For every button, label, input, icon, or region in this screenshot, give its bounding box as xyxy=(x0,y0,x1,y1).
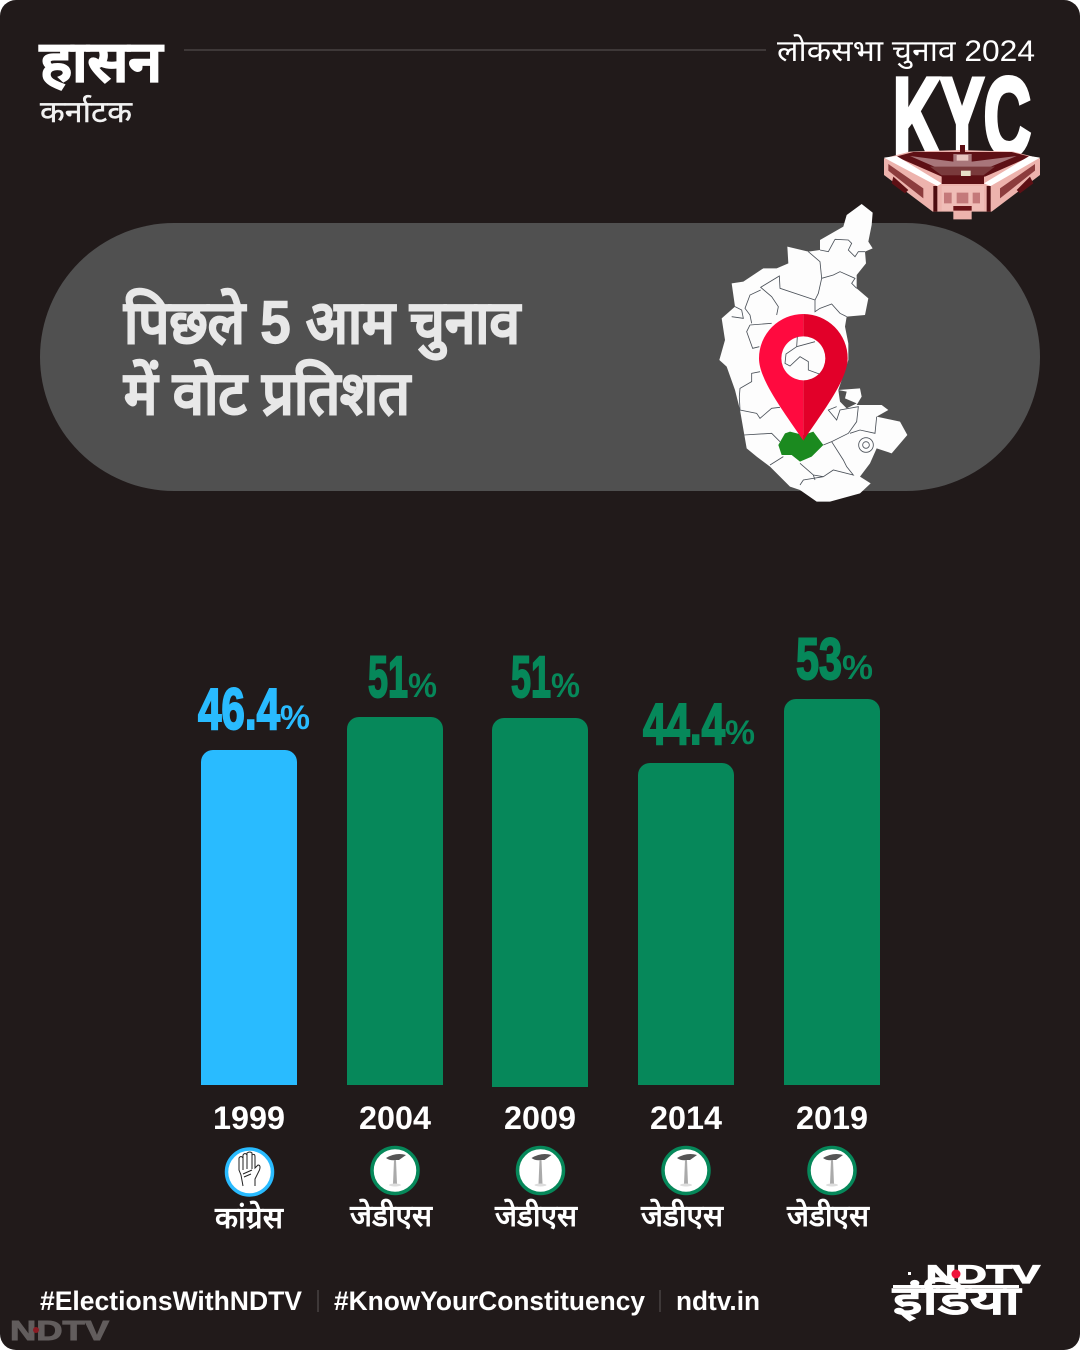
NDTV watermark: NDTV xyxy=(10,1315,109,1346)
bar chart xyxy=(198,627,880,1087)
map of Karnataka xyxy=(719,204,907,502)
hashtag: elections: #ElectionsWithNDTV xyxy=(40,1286,302,1316)
icon: JDS symbol 2014 xyxy=(663,1148,709,1194)
bar 2009: % xyxy=(551,667,580,705)
footer hashtags xyxy=(40,1286,760,1316)
banner heading xyxy=(123,288,522,427)
India wordmark: इंडिया xyxy=(892,1277,1022,1323)
party label: Congress: कांग्रेस xyxy=(214,1200,285,1235)
bar 2019: % xyxy=(842,649,873,687)
bar 1999: % xyxy=(280,699,310,737)
state outline xyxy=(719,204,907,502)
KYC logo with parliament xyxy=(884,56,1040,219)
bar 2019 xyxy=(784,627,880,1085)
bar 2009: 51 xyxy=(511,645,551,710)
icon: parliament building xyxy=(884,145,1040,219)
icon: JDS symbol 2004 xyxy=(372,1148,418,1194)
bar 2004: % xyxy=(408,667,437,705)
year 2019: 2019 xyxy=(796,1100,868,1136)
district borders xyxy=(732,239,877,485)
hole patch xyxy=(838,390,857,408)
party label: JDS 2014: जेडीएस xyxy=(640,1198,725,1233)
location pin xyxy=(759,314,848,441)
icon: JDS symbol 2009 xyxy=(518,1148,564,1194)
bar 2019: 53 xyxy=(796,627,842,692)
year 2009: 2009 xyxy=(504,1100,576,1136)
NDTV India logo xyxy=(892,1261,1041,1323)
header label: election: लोकसभा चुनाव 2024 xyxy=(777,34,1035,70)
website: ndtv.in xyxy=(676,1286,760,1316)
party label: JDS 2004: जेडीएस xyxy=(349,1198,434,1233)
party label: JDS 2019: जेडीएस xyxy=(786,1198,871,1233)
bar 1999 xyxy=(198,677,310,1085)
bar 2014: % xyxy=(725,714,755,752)
hashtag: constituency: #KnowYourConstituency xyxy=(334,1286,645,1316)
Bengaluru wards xyxy=(859,438,873,452)
year axis labels xyxy=(213,1100,868,1136)
bar 2009 xyxy=(492,645,588,1087)
year 2004: 2004 xyxy=(359,1100,431,1136)
bar 2014 xyxy=(638,692,755,1085)
title: constituency: हासन xyxy=(39,30,164,93)
heading line 2: में वोट प्रतिशत xyxy=(123,359,412,427)
bar 1999: 46.4 xyxy=(198,677,280,742)
year 2014: 2014 xyxy=(650,1100,722,1136)
heading line 1: पिछले 5 आम चुनाव xyxy=(123,288,522,361)
bar 2014: 44.4 xyxy=(643,692,725,757)
banner panel xyxy=(40,223,1040,491)
year 1999: 1999 xyxy=(213,1100,285,1136)
bar 2004 xyxy=(347,645,443,1085)
bar 2004: 51 xyxy=(368,645,408,710)
icon: Congress hand symbol xyxy=(226,1149,272,1195)
party label: JDS 2009: जेडीएस xyxy=(494,1198,579,1233)
subtitle: state: कर्नाटक xyxy=(40,95,133,129)
icon: JDS symbol 2019 xyxy=(809,1148,855,1194)
NDTV wordmark: NDTV xyxy=(926,1261,1041,1289)
Hassan district highlight xyxy=(778,432,823,462)
